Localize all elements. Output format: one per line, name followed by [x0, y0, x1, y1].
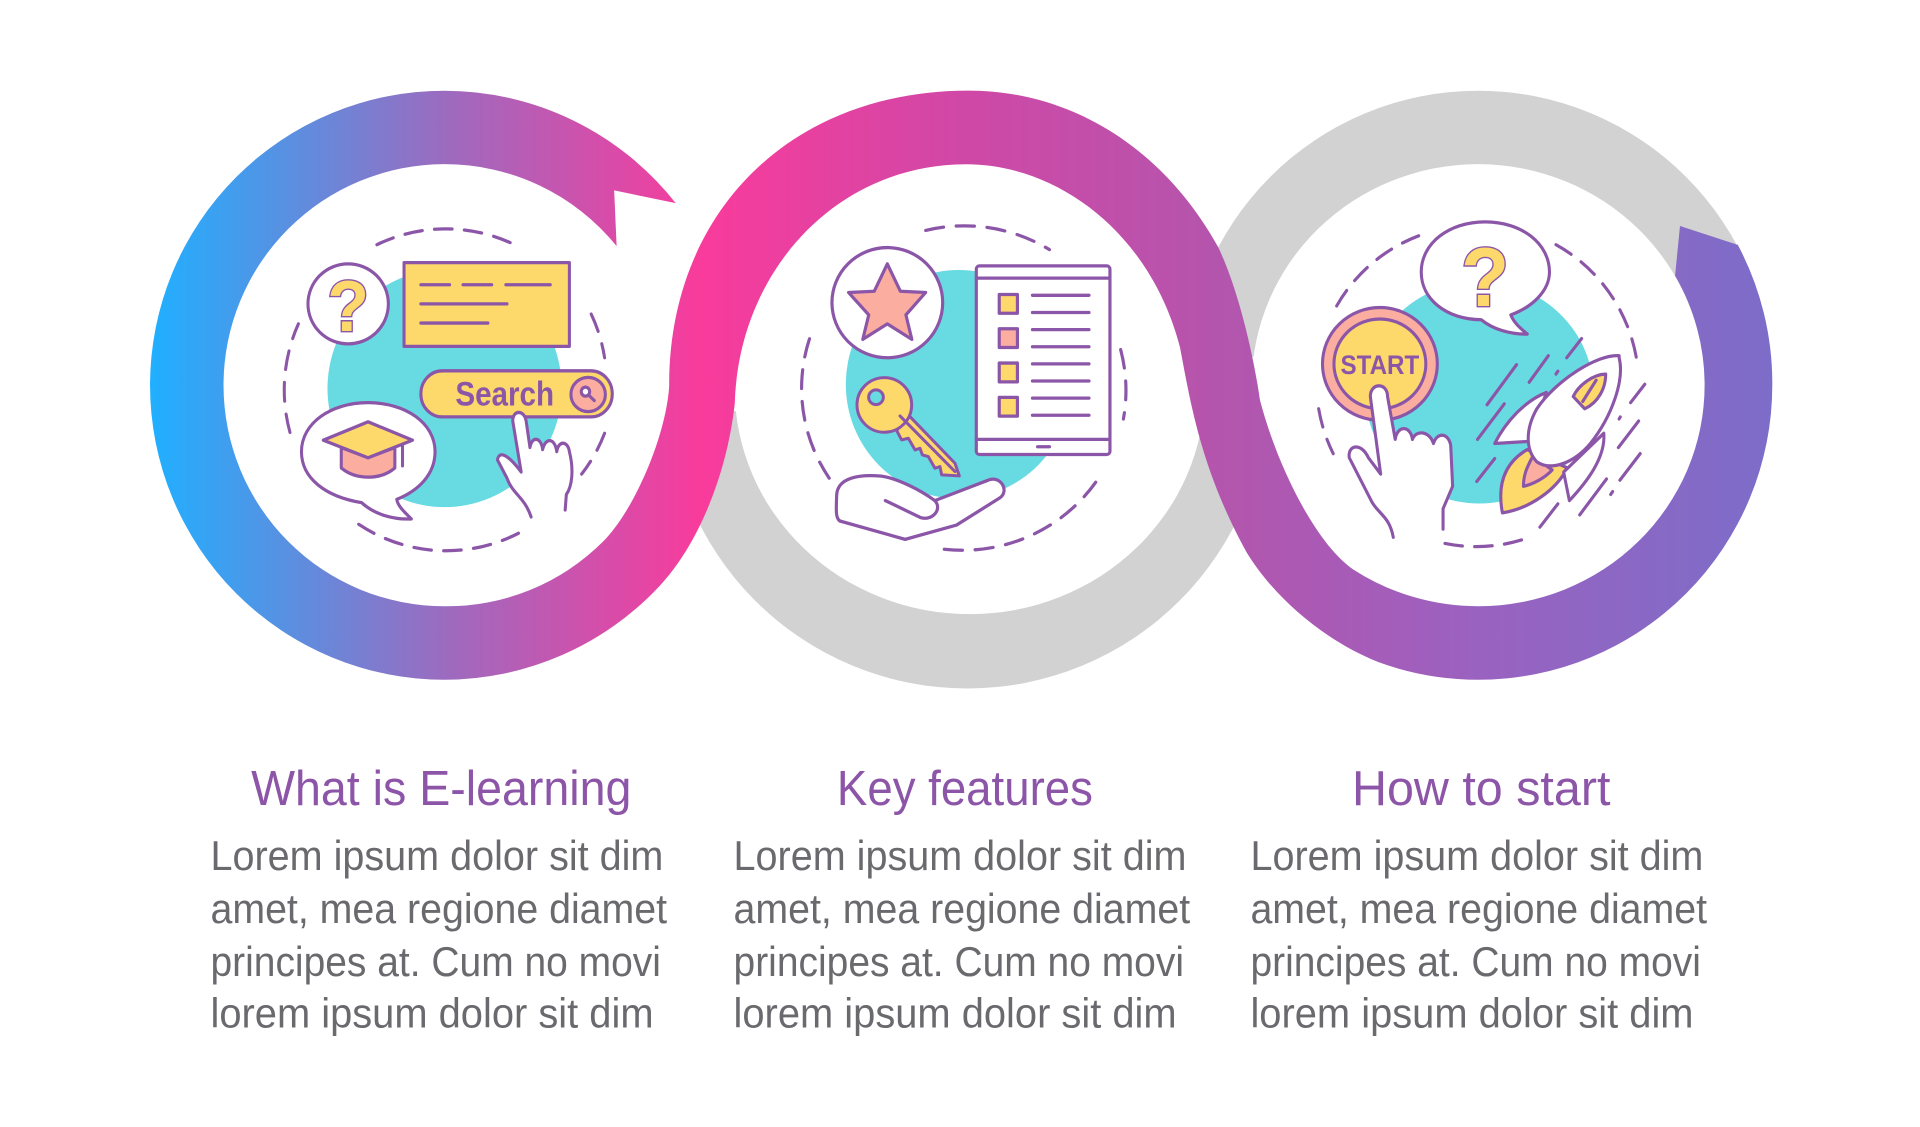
body text: principes at. Cum no movi	[1250, 938, 1701, 985]
start button	[1322, 308, 1437, 420]
grey ring: right	[1218, 90, 1736, 357]
heading: How to start	[1352, 761, 1611, 816]
text card	[404, 263, 569, 346]
body text: lorem ipsum dolor sit dim	[210, 990, 654, 1037]
body text: amet, mea regione diamet	[210, 885, 667, 932]
speech bubble with question mark	[1421, 222, 1549, 334]
body text	[734, 832, 1190, 1037]
search bar: Search	[455, 376, 554, 414]
pointing hand	[1349, 386, 1453, 537]
body text: principes at. Cum no movi	[734, 938, 1184, 985]
body text	[1250, 832, 1707, 1037]
column 1 text	[210, 761, 667, 1037]
dashed orbit	[1319, 235, 1636, 547]
body text: Lorem ipsum dolor sit dim	[1250, 832, 1703, 879]
dashed orbit	[284, 229, 605, 551]
pointing hand	[497, 412, 572, 517]
right ring interior	[1252, 164, 1705, 606]
column 3 text	[1250, 761, 1707, 1037]
infographic	[150, 90, 1772, 1036]
question circle: ?	[327, 265, 369, 347]
body text: amet, mea regione diamet	[734, 885, 1190, 932]
body text: lorem ipsum dolor sit dim	[1250, 990, 1694, 1037]
rocket	[1495, 356, 1620, 513]
icon: how to start	[1319, 222, 1645, 547]
tablet checklist	[976, 266, 1110, 454]
icon: key	[857, 378, 959, 476]
start button: START	[1340, 349, 1419, 380]
icon: e-learning search	[284, 229, 612, 551]
body text: lorem ipsum dolor sit dim	[734, 990, 1177, 1037]
body text: principes at. Cum no movi	[210, 938, 661, 985]
column 2 text	[734, 761, 1190, 1037]
icon: key features	[802, 226, 1126, 550]
heading: What is E-learning	[251, 761, 631, 816]
blob	[846, 270, 1071, 499]
open hand	[836, 476, 1004, 539]
grey ring: middle	[700, 411, 1234, 688]
dashed orbit	[802, 226, 1126, 550]
body text: Lorem ipsum dolor sit dim	[210, 832, 663, 879]
body text: Lorem ipsum dolor sit dim	[734, 832, 1186, 879]
speech bubble with question mark: ?	[1461, 232, 1509, 324]
blob	[327, 270, 562, 507]
middle ring interior	[735, 164, 1205, 614]
speed lines	[1477, 339, 1645, 527]
gradient ribbon	[150, 91, 1772, 680]
star badge	[832, 248, 943, 358]
blob	[1365, 281, 1593, 503]
body text: amet, mea regione diamet	[1250, 885, 1707, 932]
search bar	[421, 371, 612, 417]
speech bubble with graduation cap	[301, 403, 435, 519]
question circle	[308, 264, 388, 347]
body text	[210, 832, 667, 1037]
heading: Key features	[837, 761, 1093, 816]
